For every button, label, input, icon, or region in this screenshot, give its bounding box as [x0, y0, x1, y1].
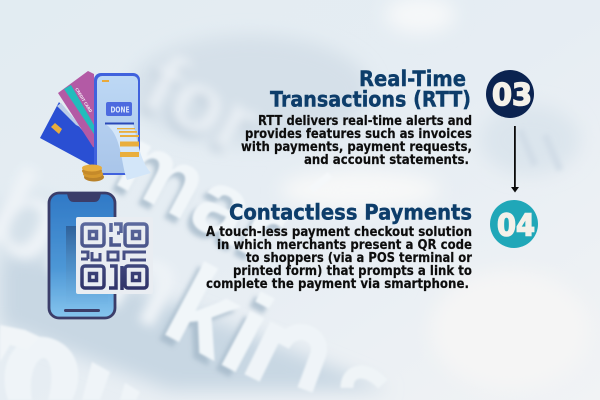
phone body: [94, 73, 140, 175]
text block: RTT description: RTT delivers real-time alerts and: [258, 114, 472, 129]
background: blurred 3D lettering: ki: [140, 245, 285, 400]
pink card: [58, 71, 96, 148]
done button: DONE: [110, 106, 130, 114]
heading: Real-Time Transactions (RTT): [270, 67, 471, 112]
receipt: [105, 122, 151, 180]
text block: Contactless description: to shoppers (via a POS terminal or: [246, 251, 473, 266]
decorative remainder of lettering: [4, 337, 78, 400]
icon: phone with payment cards and receipt: [40, 71, 151, 182]
teal stripe: [64, 85, 94, 134]
QR card: [76, 217, 153, 294]
text block: RTT description: provides features such as invoices: [245, 127, 472, 142]
background: blurred 3D lettering: mar: [96, 112, 300, 287]
heading: Contactless Payments: Contactless Payments: [229, 200, 472, 224]
badge: 03: [486, 70, 534, 118]
background: blurred 3D lettering: for: [129, 36, 274, 173]
text block: Contactless description: printed form) that prompts a link to: [233, 264, 472, 279]
text block: RTT description: with payments, payment requests,: [241, 140, 472, 155]
heading: Real-Time Transactions (RTT): Transactions (RTT): [270, 88, 471, 112]
text block: Contactless description: A touch-less payment checkout solution: [206, 225, 472, 240]
text block: Contactless description: complete the payment via smartphone.: [206, 277, 469, 292]
text block: RTT description: [241, 114, 472, 168]
background: blurred 3D lettering: for: [125, 40, 270, 177]
badge: 04: [490, 200, 538, 248]
text block: Contactless description: [206, 225, 473, 292]
badge: 04: 04: [497, 208, 535, 244]
card label: CREDIT CARD: [74, 87, 94, 114]
blue card: [40, 102, 96, 168]
background: blurred 3D lettering: ki: [146, 240, 291, 398]
badge: 03: 03: [492, 78, 532, 113]
card chip: [51, 123, 62, 134]
text block: Contactless description: in which merchants present a QR code: [217, 238, 472, 253]
heading: Real-Time Transactions (RTT): Real-Time: [359, 67, 466, 91]
coins: [82, 164, 104, 182]
text block: RTT description: and account statements.: [304, 153, 469, 168]
phone status dots: [102, 80, 109, 82]
background: blurred 3D lettering: mar: [101, 107, 305, 282]
icon: smartphone with QR code: [49, 193, 153, 318]
arrow: 03 to 04: [511, 126, 519, 192]
